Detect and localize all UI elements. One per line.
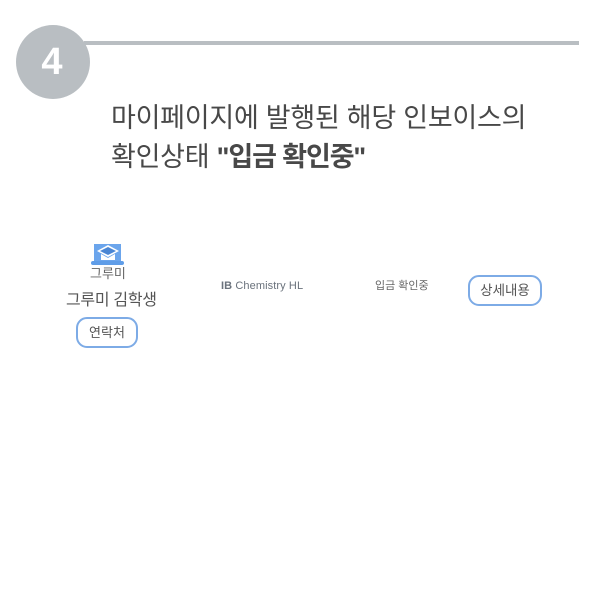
heading [111, 103, 526, 172]
contact button: 연락처 [89, 325, 125, 340]
course name: IB Chemistry HL [221, 280, 303, 292]
step number badge [16, 25, 90, 99]
heading: 확인상태 "입금 확인중" [111, 142, 365, 172]
icon: graduation cap on laptop [91, 244, 124, 265]
logo wordmark: 그루미 [90, 266, 126, 281]
payment status: 입금 확인중 [375, 280, 429, 292]
contact button [76, 317, 138, 348]
header rule [84, 41, 579, 45]
tutor name: 그루미 김학생 [66, 292, 157, 309]
details button [468, 275, 542, 306]
step number badge: 4 [41, 41, 63, 83]
heading: 마이페이지에 발행된 해당 인보이스의 [111, 103, 526, 133]
details button: 상세내용 [480, 283, 530, 298]
